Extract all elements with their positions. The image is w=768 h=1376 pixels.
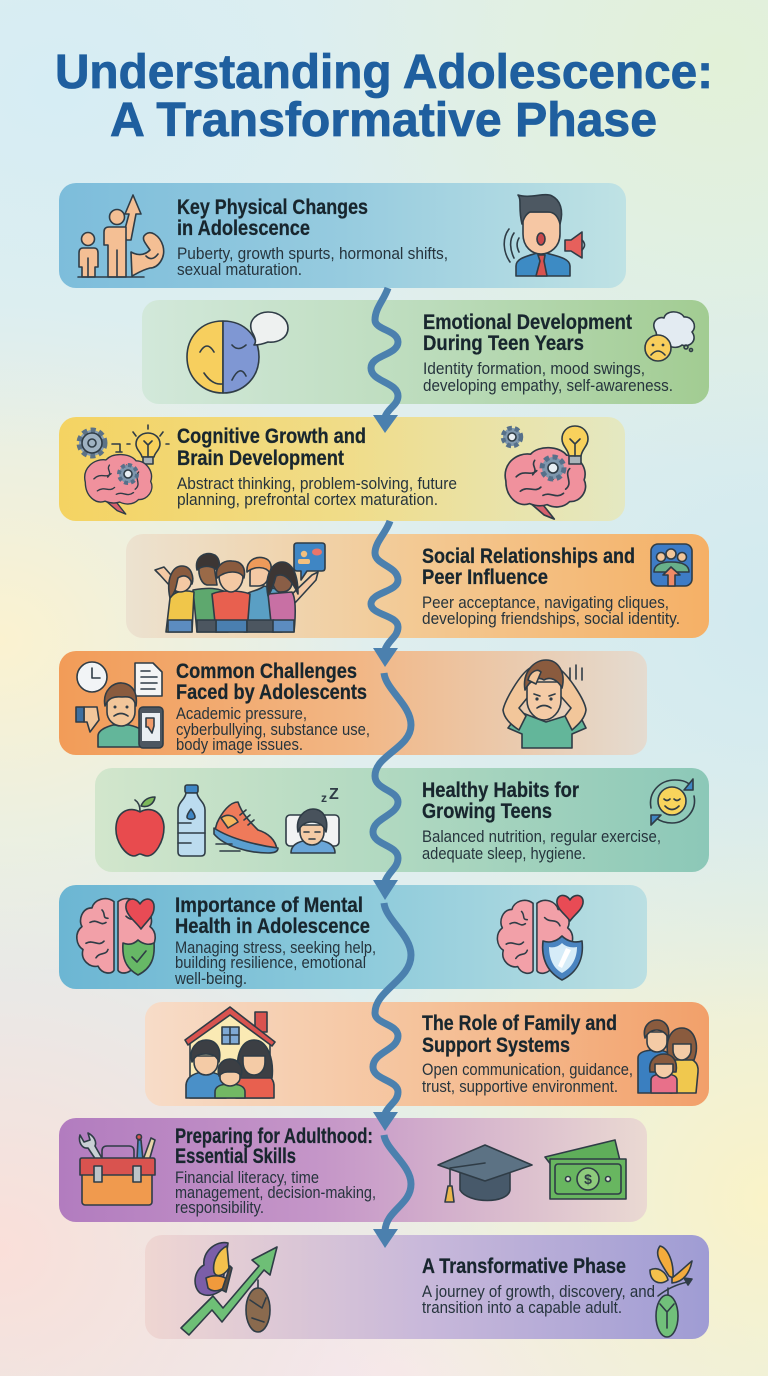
panel: family and support [145,1002,709,1106]
icon: brain with heart and green shield [77,899,155,975]
text: challenges description [176,705,370,754]
icon: butterfly emerging from chrysalis [650,1246,692,1337]
heading: social relationships [422,545,635,589]
heading: healthy habits [422,779,579,823]
icon: house with family [185,1007,275,1098]
text: transformative description [422,1283,655,1317]
icon: stressed student with clock, paper, phone [76,662,163,748]
text: challenges description: body image issues. [176,736,303,754]
icon: toolbox [79,1133,155,1205]
panel: key physical changes [59,183,626,288]
arrow: mental health to adulthood [373,903,411,1131]
text: adulthood description: Financial literacy, time [175,1169,319,1187]
icon: butterfly, rising arrow and cocoon [181,1243,277,1335]
heading: family: The Role of Family and [422,1012,617,1035]
icon: stressed boy holding head [503,660,586,748]
icon: brain gear and bulb small [79,425,169,514]
panel: common challenges [59,651,647,755]
icon: thought cloud with sad face [645,312,694,361]
heading: social relationships: Peer Influence [422,566,548,589]
icon: sleeping teen with z letters: Z [329,786,339,803]
heading: adulthood [175,1125,373,1168]
arrow: physical to cognitive [371,288,398,433]
icon: graduation cap [438,1145,532,1202]
icon: smiling face with cycle arrows [651,779,694,825]
heading: mental health: Health in Adolescence [175,915,370,938]
icon: sleeping teen with z letters: z [321,791,327,805]
panel: mental health [59,885,647,989]
icon: running shoe [214,802,278,853]
arrow: challenges to mental health [373,673,411,900]
heading: social relationships: Social Relationships and [422,545,635,568]
icon: water bottle [178,785,205,856]
heading: mental health [175,894,370,938]
panel: healthy habits [95,768,709,872]
heading: transformative phase: A Transformative Phase [422,1255,626,1278]
heading: cognitive growth: Cognitive Growth and [177,425,366,448]
icon: chat bubble with people [294,543,325,580]
heading: common challenges [176,660,367,704]
panel: preparing for adulthood [59,1118,647,1222]
text: emotional description: Identity formation, mood swings, [423,360,645,378]
text: emotional description: developing empathy, self-awareness. [423,377,673,395]
title [55,46,713,147]
text: physical changes description [177,245,448,279]
text: habits description: adequate sleep, hygiene. [422,845,586,863]
title: Understanding Adolescence: [55,46,713,99]
heading: family [422,1012,617,1057]
panel: cognitive growth [59,417,625,521]
text: social description [422,594,680,628]
text: family description: Open communication, guidance, [422,1061,633,1079]
text: family description [422,1061,633,1096]
text: mental health description [174,939,376,988]
text: physical changes description: Puberty, growth spurts, hormonal shifts, [177,245,448,263]
icon: group of five friends [155,554,318,632]
text: challenges description: Academic pressure, [176,705,307,723]
text: adulthood description: responsibility. [175,1199,264,1217]
icon: boy with voice change and megaphone [504,195,584,276]
panel: emotional development [142,300,709,404]
text: transformative description: transition into a capable adult. [422,1299,622,1317]
heading: emotional development: Emotional Development [423,311,632,334]
text: social description: Peer acceptance, navigating cliques, [422,594,669,612]
title: A Transformative Phase [110,94,657,147]
text: challenges description: cyberbullying, substance use, [176,721,370,739]
text: mental health description: well-being. [174,970,247,988]
text: cognitive description [177,475,457,509]
heading: adulthood: Essential Skills [175,1145,296,1168]
text: adulthood description: management, decision-making, [175,1184,376,1202]
icon: sleeping teen with z letters [286,786,339,853]
heading: mental health: Importance of Mental [175,894,363,917]
heading: cognitive growth [177,425,366,470]
text: cognitive description: planning, prefrontal cortex maturation. [177,491,438,509]
heading: key physical changes [177,196,368,240]
text: mental health description: Managing stress, seeking help, [175,939,376,957]
arrow: cognitive to challenges [371,521,398,667]
icon: stack of money [545,1140,626,1199]
icon: growing figures and muscle arm [78,195,164,277]
text: adulthood description [175,1169,376,1217]
icon: brain with heart and blue shield [497,895,583,980]
heading: cognitive growth: Brain Development [177,447,344,470]
icon: apple [116,797,164,856]
text: habits description: Balanced nutrition, regular exercise, [422,828,661,846]
text: family description: trust, supportive environment. [422,1078,618,1096]
heading: healthy habits: Healthy Habits for [422,779,579,802]
heading: healthy habits: Growing Teens [422,800,552,823]
icon: half happy half sad face with speech bubble [187,312,288,393]
heading: common challenges: Common Challenges [176,660,357,683]
text: cognitive description: Abstract thinking, problem-solving, future [177,475,457,493]
panel: social relationships [126,534,709,638]
text: physical changes description: sexual maturation. [177,261,302,279]
icon: brain gear and bulb large [503,426,588,519]
text: habits description [422,828,661,863]
heading: common challenges: Faced by Adolescents [176,681,367,704]
panel: a transformative phase [145,1235,709,1339]
icon: family portrait [638,1020,698,1093]
heading: key physical changes: Key Physical Changes [177,196,368,219]
icon: stack of money: $ [584,1171,592,1187]
icon: peer group badge [651,544,692,586]
heading: family: Support Systems [422,1034,570,1057]
text: mental health description: building resilience, emotional [175,954,366,972]
text: emotional description [423,360,673,395]
text: transformative description: A journey of growth, discovery, and [422,1283,655,1301]
heading: adulthood: Preparing for Adulthood: [175,1125,373,1148]
arrow: adulthood to transformative phase [373,1135,411,1248]
text: social description: developing friendships, social identity. [422,610,680,628]
heading: emotional development: During Teen Years [423,332,584,355]
heading: emotional development [423,311,632,355]
heading: key physical changes: in Adolescence [177,217,310,240]
